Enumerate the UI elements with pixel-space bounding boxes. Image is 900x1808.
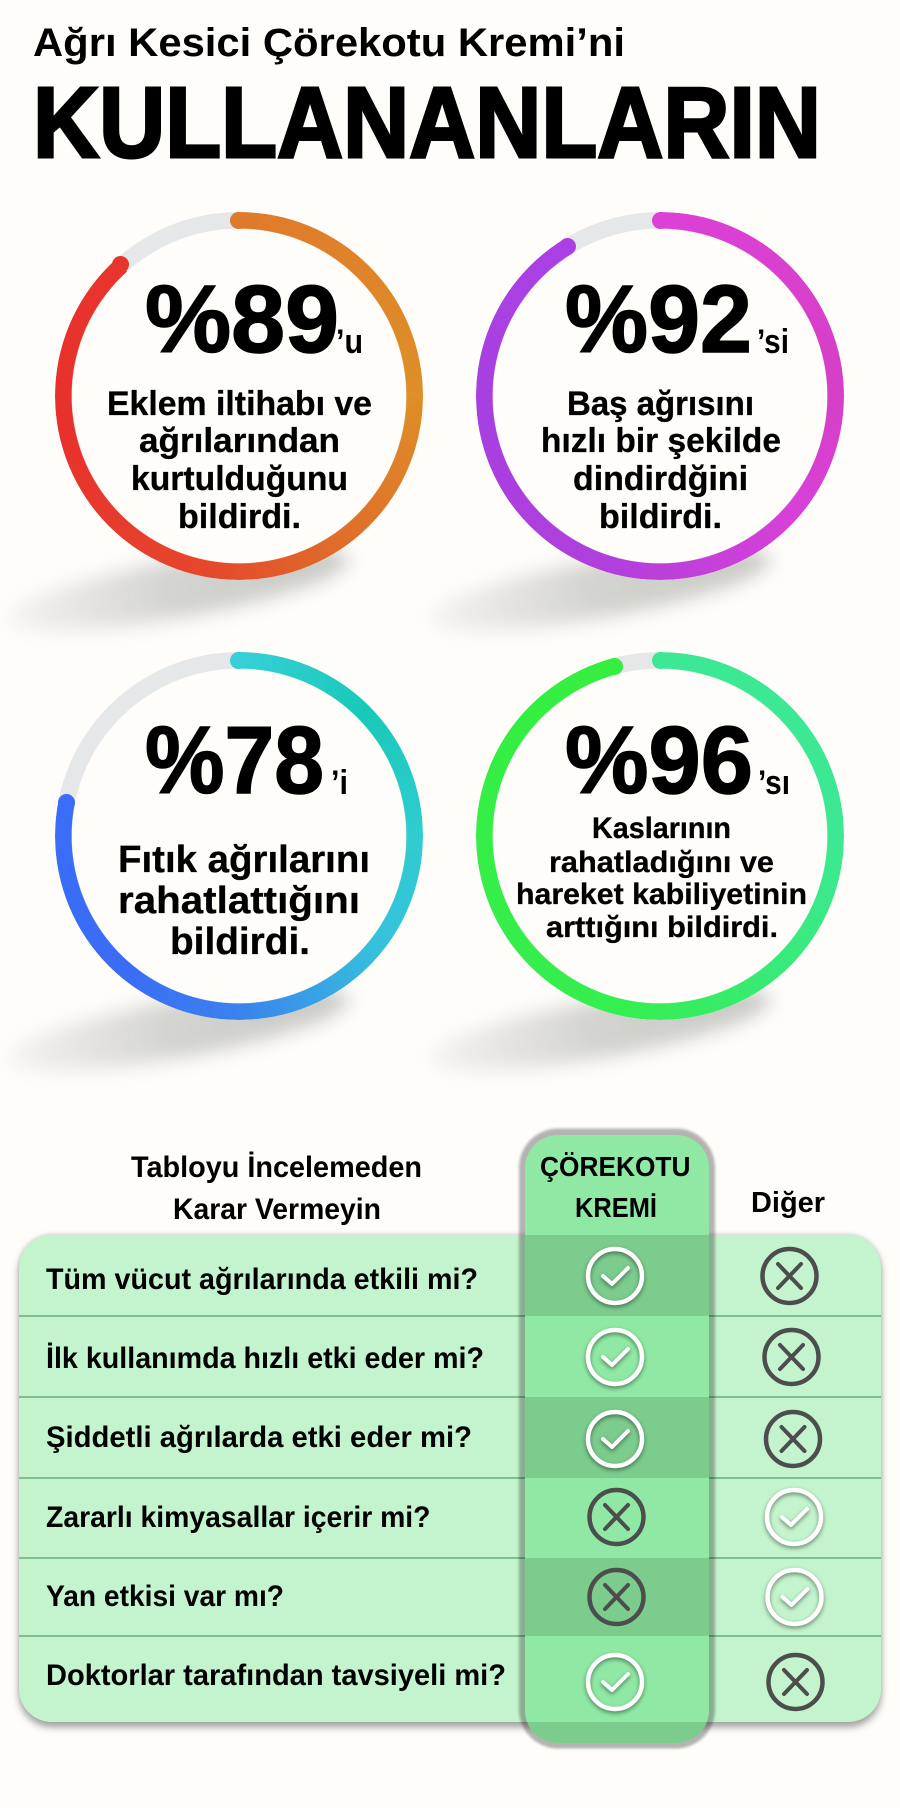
- ring end cap: [558, 238, 576, 255]
- description: Fıtık ağrılarını: [118, 839, 370, 881]
- title: [33, 21, 821, 179]
- disk: [54, 652, 422, 1020]
- description: [516, 812, 807, 944]
- panel: stat 89 percent: [18, 212, 423, 634]
- icon: cross row 1 other: [762, 1249, 816, 1303]
- panel: stat 92 percent: [440, 212, 844, 634]
- suffix: ’sı: [758, 764, 790, 802]
- ring end cap: [112, 256, 129, 273]
- description: Eklem iltihabı ve: [107, 385, 372, 423]
- table background: [19, 1235, 881, 1722]
- stat text: [541, 266, 789, 536]
- row questions: Doktorlar tarafından tavsiyeli mi?: [46, 1659, 506, 1692]
- ring start cap: [230, 652, 247, 668]
- icon: cross row 5 cream: [590, 1570, 644, 1624]
- table header text: Tabloyu İncelemeden: [131, 1151, 422, 1184]
- suffix: ’u: [336, 323, 363, 361]
- ring start cap: [230, 212, 247, 228]
- table header text: Karar Vermeyin: [173, 1193, 381, 1226]
- row dividers: [19, 1316, 881, 1636]
- ring start cap: [652, 652, 668, 668]
- description: rahatladığını ve: [549, 846, 774, 879]
- table header text: [131, 1151, 422, 1226]
- column heading: Çörekotu Kremi: [540, 1151, 690, 1223]
- progress ring: [54, 652, 422, 1020]
- main heading: KULLANANLARIN: KULLANANLARIN: [33, 67, 821, 179]
- description: Kaslarının: [592, 812, 731, 845]
- ground shadow: [4, 970, 353, 1088]
- description: bildirdi.: [170, 921, 310, 963]
- column heading: Çörekotu Kremi: ÇÖREKOTU: [540, 1151, 690, 1182]
- ground shadow: [426, 530, 775, 648]
- ring start cap: [652, 212, 668, 228]
- row questions: [46, 1263, 506, 1692]
- disk: [54, 212, 422, 580]
- ring end cap: [58, 794, 75, 810]
- description: [107, 385, 372, 536]
- description: arttığını bildirdi.: [546, 911, 778, 944]
- description: kurtulduğunu: [131, 460, 348, 498]
- description: dindirdğini: [573, 460, 748, 498]
- description: rahatlattığını: [118, 880, 360, 922]
- icon: cross row 4 cream: [590, 1490, 644, 1544]
- icon: check row 6 cream: [588, 1655, 642, 1709]
- percentage: %96: [565, 707, 753, 814]
- description: [541, 385, 781, 536]
- icon: check row 3 cream: [588, 1412, 642, 1466]
- description: hızlı bir şekilde: [541, 422, 781, 460]
- icon: cross row 2 other: [764, 1330, 818, 1384]
- column heading: Diğer: Diğer: [751, 1187, 825, 1219]
- stat text: [118, 707, 370, 963]
- progress ring: [476, 652, 844, 1020]
- highlighted column: [519, 1128, 715, 1748]
- ring end cap: [606, 658, 623, 674]
- row questions: Şiddetli ağrılarda etki eder mi?: [46, 1421, 472, 1454]
- icon: check row 1 cream: [588, 1249, 642, 1303]
- description: ağrılarından: [139, 422, 340, 460]
- icon: cross row 6 other: [768, 1655, 822, 1709]
- description: Baş ağrısını: [567, 385, 754, 423]
- row questions: Yan etkisi var mı?: [46, 1580, 284, 1613]
- percentage: %89: [145, 266, 339, 373]
- disk: [476, 212, 844, 580]
- progress ring: [54, 212, 422, 580]
- percentage: %78: [145, 707, 324, 814]
- panel: stat 96 percent: [440, 652, 844, 1074]
- ground shadow: [4, 530, 353, 648]
- disk: [476, 652, 844, 1020]
- column heading: Çörekotu Kremi: KREMİ: [575, 1192, 657, 1223]
- row questions: İlk kullanımda hızlı etki eder mi?: [46, 1342, 484, 1375]
- percentage: %92: [565, 266, 752, 373]
- suffix: ’si: [757, 323, 789, 361]
- description: bildirdi.: [599, 498, 722, 536]
- panel: comparison table: [14, 1127, 886, 1750]
- progress ring: [476, 212, 844, 580]
- icon: check row 4 other: [767, 1490, 821, 1544]
- icon: check row 2 cream: [588, 1330, 642, 1384]
- ground shadow: [426, 970, 775, 1088]
- subtitle: Ağrı Kesici Çörekotu Kremi'ni: Ağrı Kesici Çörekotu Kremi’ni: [33, 21, 625, 65]
- icon: cross row 3 other: [766, 1412, 820, 1466]
- icon: check row 5 other: [768, 1570, 822, 1624]
- row questions: Zararlı kimyasallar içerir mi?: [46, 1501, 430, 1534]
- suffix: ’i: [331, 764, 348, 802]
- stat text: [516, 707, 807, 944]
- description: bildirdi.: [178, 498, 301, 536]
- stat text: [107, 266, 372, 536]
- row questions: Tüm vücut ağrılarında etkili mi?: [46, 1263, 478, 1296]
- description: hareket kabiliyetinin: [516, 878, 807, 911]
- description: [118, 839, 370, 963]
- panel: stat 78 percent: [18, 652, 423, 1074]
